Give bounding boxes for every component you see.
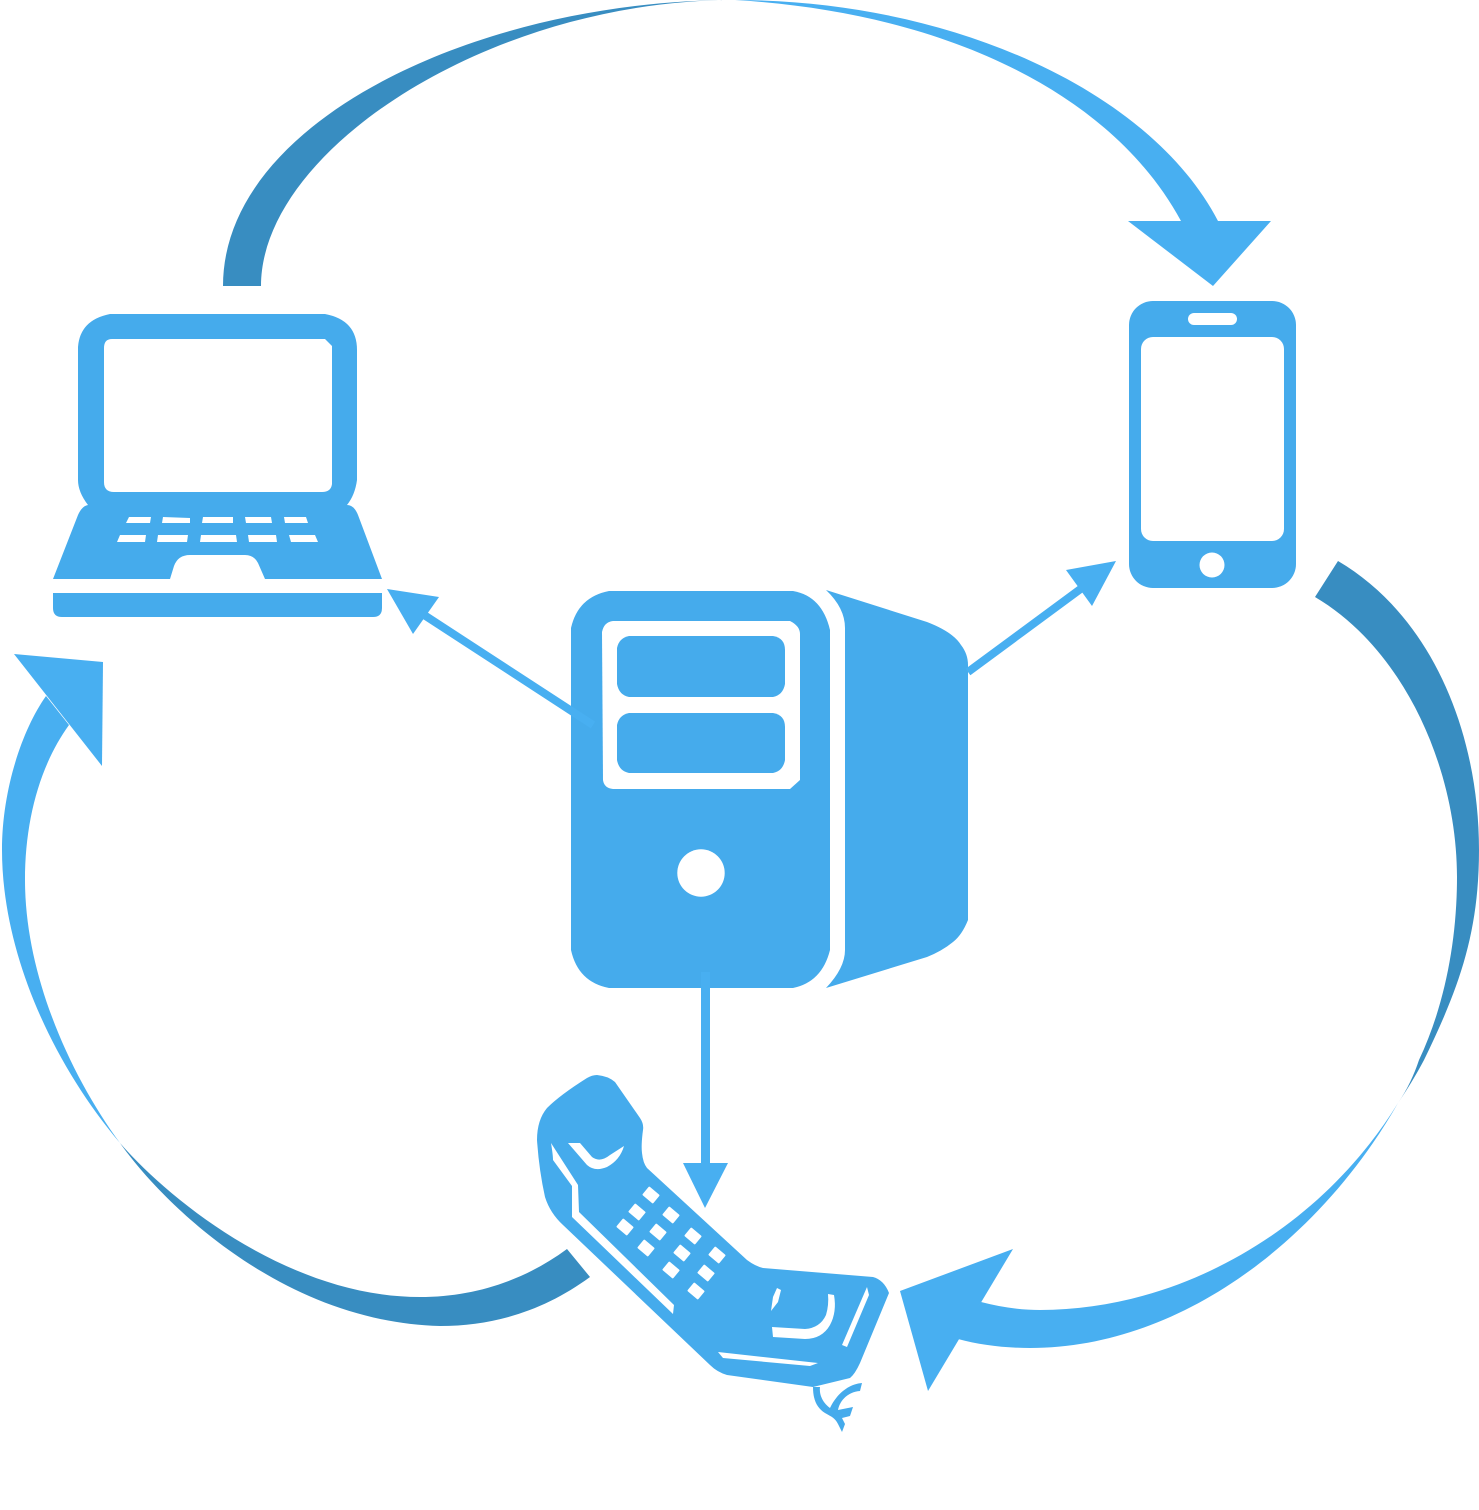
arrow: telephone to laptop	[2, 654, 590, 1326]
icon: smartphone	[1129, 301, 1296, 588]
icon: telephone handset	[537, 1075, 889, 1432]
icon: laptop	[53, 314, 382, 617]
arrow: laptop to smartphone	[223, 0, 1271, 286]
arrow: server to laptop	[387, 589, 593, 725]
icon: server tower	[571, 590, 968, 988]
arrow: smartphone to telephone	[900, 561, 1479, 1391]
arrow: server to smartphone	[968, 561, 1116, 672]
arrow: server to telephone	[683, 972, 728, 1208]
